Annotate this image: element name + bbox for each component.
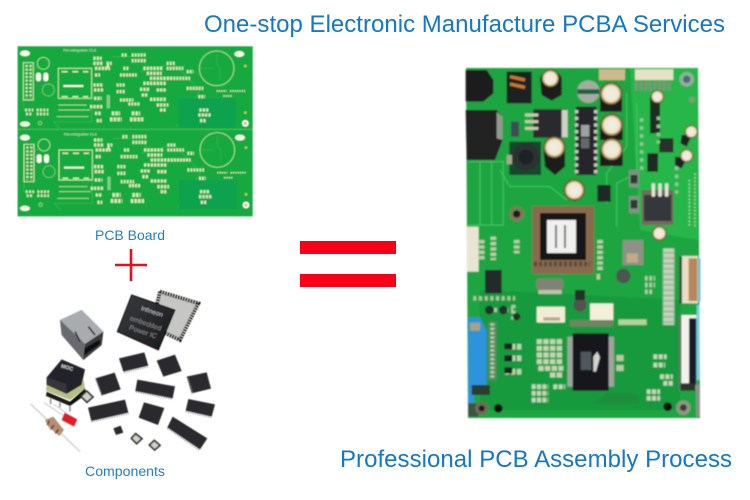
main QFP chip bbox=[567, 333, 614, 391]
panel: electronic components photo bbox=[31, 292, 215, 452]
title: One-stop Electronic Manufacture PCBA Services bbox=[204, 11, 725, 38]
upper half components bbox=[466, 69, 698, 241]
black embedded Power IC chip: embedded bbox=[129, 315, 162, 333]
PLCC socket chip bbox=[532, 206, 594, 274]
label: Components: Components bbox=[85, 463, 165, 479]
transformer: MOC bbox=[60, 364, 74, 373]
panel: bare PCB board photo bbox=[18, 46, 253, 216]
panel: assembled PCBA photo bbox=[466, 68, 700, 418]
silver QFN chip, rear bbox=[152, 292, 198, 340]
column of capacitors bbox=[600, 82, 623, 166]
blue VGA connector bbox=[468, 317, 497, 403]
resistor and LED bbox=[31, 403, 80, 452]
DIP IC bbox=[576, 107, 597, 175]
capacitors lower bbox=[543, 136, 585, 202]
board base bbox=[466, 68, 700, 418]
RJ45 connector bbox=[60, 310, 103, 360]
small leadless packages bbox=[81, 391, 160, 450]
crystal bbox=[536, 278, 563, 290]
white connectors bbox=[537, 303, 613, 327]
lower half components bbox=[467, 227, 700, 417]
resistor cluster bbox=[537, 342, 563, 375]
FPC connectors bbox=[679, 256, 700, 391]
upper right capacitor bbox=[616, 269, 631, 283]
subtitle: Professional PCB Assembly Process bbox=[340, 446, 732, 473]
SOT regulator bbox=[511, 109, 568, 138]
black embedded Power IC chip: Power IC bbox=[128, 325, 157, 341]
mounting holes bbox=[468, 385, 700, 417]
chip leads bbox=[91, 367, 211, 450]
black embedded Power IC chip: Infineon bbox=[140, 305, 164, 319]
transformer bbox=[46, 359, 87, 412]
bottom board unit: Fire extinguisher V1.A bbox=[64, 133, 98, 137]
black embedded Power IC chip bbox=[117, 295, 175, 350]
icon: red equals sign bbox=[300, 241, 396, 287]
icon: red plus sign bbox=[115, 249, 147, 281]
top board unit: Fire extinguisher V1.A bbox=[63, 48, 97, 52]
bottom board unit bbox=[20, 133, 249, 211]
scattered SOIC and QFP chips bbox=[88, 352, 215, 449]
small capacitors right bbox=[650, 90, 698, 168]
resistor column bbox=[663, 248, 675, 325]
top board unit bbox=[20, 48, 249, 128]
silver capacitor bbox=[577, 80, 600, 103]
inductor bbox=[507, 142, 541, 175]
label: PCB Board: PCB Board bbox=[95, 227, 165, 243]
TO-263 regulator bbox=[642, 183, 673, 225]
capacitor top bbox=[540, 69, 562, 101]
top connectors bbox=[599, 69, 625, 80]
